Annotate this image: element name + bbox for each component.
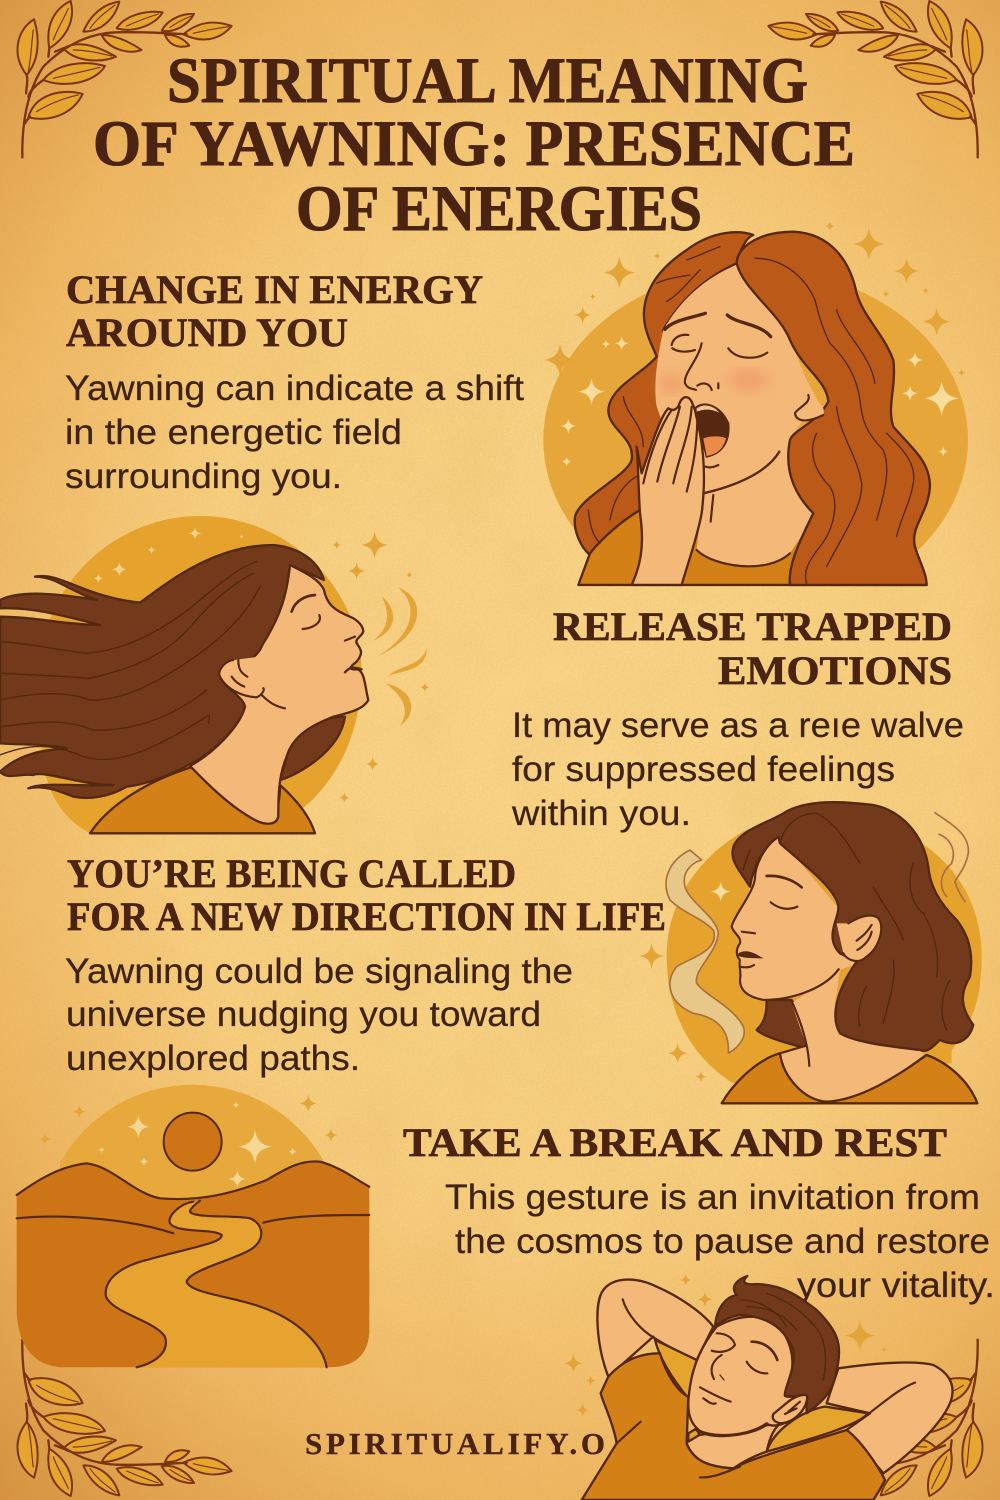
body text: Yawning can indicate a shift: [65, 369, 524, 408]
body text: Yawning could be signaling the: [65, 952, 573, 991]
river path: [106, 1201, 327, 1367]
back hair: [280, 717, 345, 780]
right arm: [827, 1363, 953, 1473]
shirt: [722, 1053, 977, 1103]
footer brand: SPIRITUALIFY.O: [305, 1426, 605, 1461]
sun: [164, 1113, 222, 1171]
features: [752, 1342, 777, 1360]
illustration: yawning woman: [543, 221, 968, 611]
hair: [715, 1276, 839, 1413]
sparkles: [94, 527, 244, 583]
heading: CHANGE IN ENERGY: [66, 267, 483, 312]
smoke: [666, 850, 744, 1053]
ear: [795, 395, 824, 420]
ear: [837, 916, 881, 960]
heading: YOU’RE BEING CALLED: [67, 851, 516, 896]
left arm: [597, 1280, 713, 1377]
body text: your vitality.: [797, 1266, 995, 1305]
text block: new direction: [65, 851, 666, 1078]
body text: surrounding you.: [65, 457, 342, 496]
body text: [65, 952, 573, 1078]
heading: EMOTIONS: [718, 648, 952, 693]
flowing hair: [0, 545, 324, 798]
eyebrows and eyes: [665, 313, 771, 337]
collar: [688, 1428, 699, 1442]
hand: [632, 397, 704, 585]
sparkles: [544, 221, 966, 377]
title: OF YAWNING: PRESENCE: [93, 108, 855, 180]
illustration: woman exhaling with flowing hair: [0, 516, 430, 833]
body text: unexplored paths.: [66, 1039, 360, 1078]
body text: in the energetic field: [65, 413, 402, 452]
heading: RELEASE TRAPPED: [553, 604, 952, 649]
illustration: resting man: [564, 1274, 953, 1500]
facial features: [767, 876, 802, 887]
face: [688, 1317, 803, 1436]
heading: [66, 267, 483, 355]
eye and brow: [292, 595, 315, 612]
heading: TAKE A BREAK AND REST: [403, 1120, 947, 1165]
hills: [17, 1161, 369, 1367]
sparkles: [639, 943, 707, 1082]
dome sky: [60, 1085, 325, 1213]
blush: [659, 369, 768, 394]
chin line: [703, 452, 779, 493]
sparkles: [564, 1274, 887, 1417]
body text: [65, 369, 524, 496]
body text: the cosmos to pause and restore: [455, 1222, 990, 1261]
body text: It may serve as a reıe walve: [512, 706, 964, 745]
heading: [553, 604, 952, 693]
nose: [685, 343, 718, 390]
heading block: change in energy: [65, 267, 524, 496]
lips: [345, 668, 362, 672]
heading: FOR A NEW DIRECTION IN LIFE: [67, 894, 666, 939]
face: [732, 837, 873, 1000]
hair: [732, 802, 973, 1051]
corner leaves: bottom left: [18, 1340, 232, 1496]
corner leaves: top right: [768, 1, 982, 157]
shirt: [578, 510, 927, 585]
body text: universe nudging you toward: [66, 995, 541, 1034]
right hair: [737, 232, 930, 585]
neck: [697, 433, 817, 566]
ear: [773, 1395, 807, 1423]
ear: [219, 657, 264, 697]
wind arcs: [373, 588, 427, 726]
heading: [67, 851, 666, 939]
body text: for suppressed feelings: [512, 750, 895, 789]
left hair: [575, 232, 753, 555]
face: [655, 265, 827, 493]
corner leaves: top left: [18, 1, 232, 157]
illustration: woman with smoke: [639, 802, 982, 1103]
body text: [511, 706, 964, 833]
title: [93, 45, 855, 245]
lower hair: [757, 1000, 810, 1048]
face and neck: [190, 565, 368, 824]
text block: take a break: [403, 1120, 995, 1305]
title: OF ENERGIES: [296, 173, 702, 245]
mouth: [695, 404, 729, 457]
heading: AROUND YOU: [66, 310, 348, 355]
body text: [445, 1178, 995, 1305]
neck: [687, 1423, 780, 1468]
corner leaves: bottom right: [768, 1340, 982, 1496]
body text: This gesture is an invitation from: [445, 1178, 980, 1217]
shirt: [582, 1353, 885, 1500]
shirt: [90, 767, 315, 833]
body text: within you.: [511, 794, 691, 833]
sparkles: [39, 1095, 338, 1145]
neck: [780, 970, 923, 1102]
pillow: [655, 1340, 697, 1398]
title: SPIRITUAL MEANING: [167, 45, 808, 117]
text block: release trapped emotions: [511, 604, 964, 833]
illustration: winding path landscape: [17, 1085, 369, 1367]
